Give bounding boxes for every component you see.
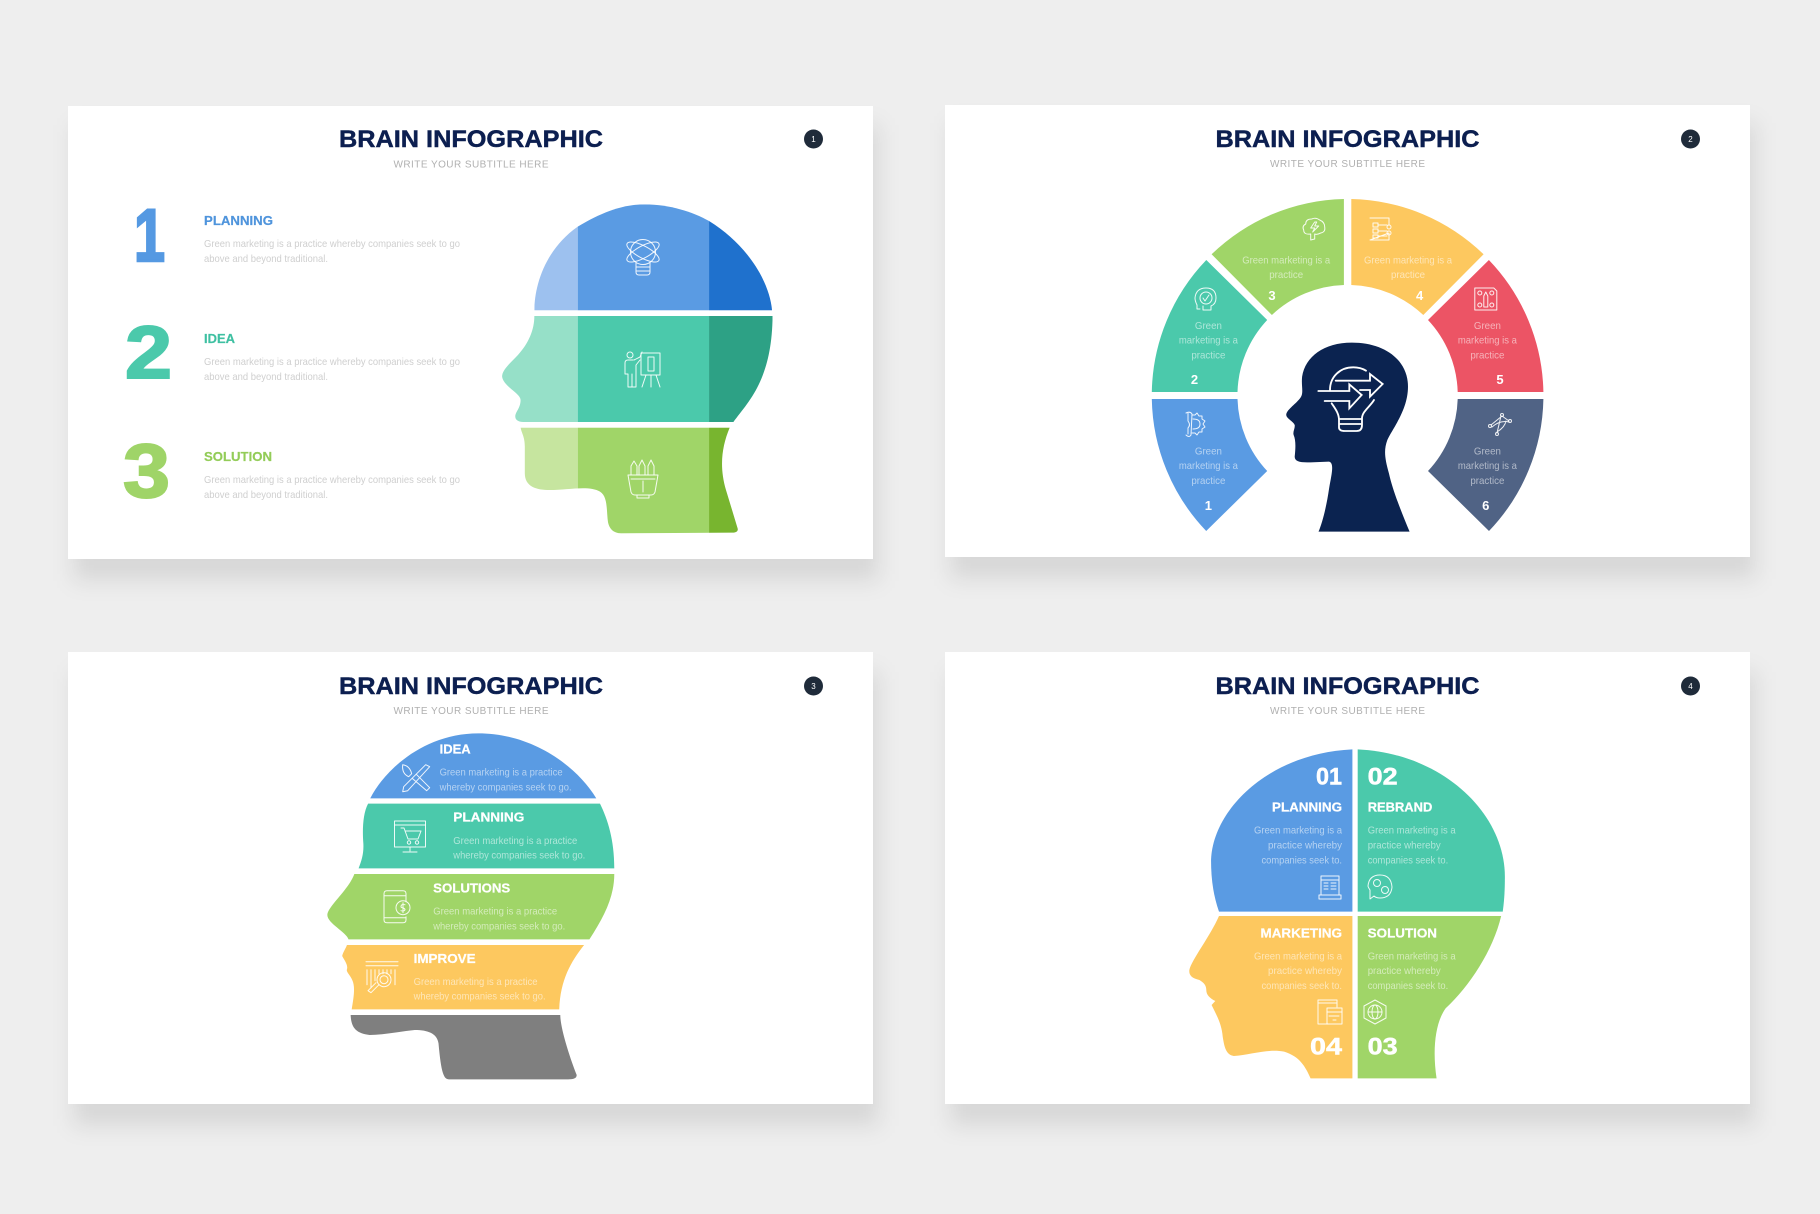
head diagram <box>494 200 778 535</box>
quadrant 03: Green marketing is a <box>1368 950 1456 962</box>
segment 5: 5 <box>1496 372 1504 387</box>
band: idea: IDEA <box>440 742 471 757</box>
page badge <box>1681 130 1700 148</box>
icon: network globe <box>1364 1000 1386 1024</box>
item 2 heading: IDEA <box>204 331 236 346</box>
subtitle: WRITE YOUR SUBTITLE HERE <box>394 706 549 717</box>
segment 1: marketing is a <box>1179 460 1238 472</box>
band: idea: Green marketing is a practice <box>440 767 563 779</box>
band: planning: Green marketing is a practice <box>453 835 577 847</box>
panel 1: three-layer head <box>68 106 873 559</box>
band: idea: whereby companies seek to go. <box>439 781 572 793</box>
segment 6: Green <box>1474 445 1501 457</box>
band: planning <box>394 810 585 862</box>
head band: top <box>534 204 772 310</box>
band: improve <box>366 951 546 1003</box>
item 3 text: Green marketing is a practice whereby companies seek to go <box>204 474 460 486</box>
band: idea <box>403 742 572 793</box>
band: solutions: whereby companies seek to go. <box>432 920 565 932</box>
item 1 text <box>204 238 460 265</box>
quadrant shapes <box>1189 749 1505 1078</box>
item 1 number: 1 <box>134 194 165 277</box>
head band shapes <box>327 733 614 1079</box>
quadrant 04: 04 <box>1310 1033 1343 1060</box>
icon: pencil cup <box>628 460 658 498</box>
segment 6: 6 <box>1482 498 1489 513</box>
item 3 text: above and beyond traditional. <box>204 489 328 501</box>
quadrant 01 <box>1254 763 1343 899</box>
segment 5: marketing is a <box>1458 335 1517 347</box>
segment 6: practice <box>1470 475 1505 487</box>
icon: flow document <box>1370 218 1391 240</box>
segment 5: practice <box>1470 349 1505 361</box>
quadrant 04: practice whereby <box>1268 965 1343 977</box>
title: BRAIN INFOGRAPHIC <box>339 673 603 700</box>
quadrant 01: Green marketing is a <box>1254 825 1342 837</box>
head silhouette <box>1286 343 1410 532</box>
segment 1: practice <box>1191 475 1226 487</box>
icon: bulb with arrows <box>1318 367 1383 431</box>
quadrant 03 <box>1364 925 1456 1060</box>
icon: laptop with dashboard <box>1319 876 1341 899</box>
quadrant 02: practice whereby <box>1368 839 1441 851</box>
icon: lightbulb with orbits <box>624 238 662 275</box>
band: planning: whereby companies seek to go. <box>452 850 585 862</box>
quadrant 03: practice whereby <box>1368 965 1441 977</box>
segment 3: 3 <box>1268 288 1276 303</box>
panel shadows <box>73 123 1756 1126</box>
segment 4: 4 <box>1416 288 1424 303</box>
segment 3 <box>1212 199 1344 315</box>
quadrant 02: companies seek to. <box>1368 854 1448 866</box>
item 2 number: 2 <box>125 311 172 394</box>
panel 4: quadrant head <box>945 652 1750 1104</box>
quadrant 04: Green marketing is a <box>1254 950 1342 962</box>
quadrant 03: SOLUTION <box>1368 925 1437 940</box>
icon: barcode with magnifier <box>366 962 398 993</box>
segment 4 <box>1351 199 1484 315</box>
title: BRAIN INFOGRAPHIC <box>1216 673 1480 700</box>
band: solutions: Green marketing is a practice <box>433 906 557 918</box>
icon: idea check <box>1195 288 1216 310</box>
segment 4: practice <box>1391 269 1425 281</box>
icon: devices <box>1318 1000 1342 1024</box>
item 1 text: Green marketing is a practice whereby companies seek to go <box>204 238 460 250</box>
panel 3: stacked head bands <box>68 652 873 1104</box>
icon: design document <box>1475 288 1497 310</box>
item 3 heading: SOLUTION <box>204 449 272 464</box>
page badge <box>804 130 823 148</box>
segment 6 <box>1428 399 1543 531</box>
quadrant 01: practice whereby <box>1268 839 1343 851</box>
segment 5: Green <box>1474 320 1501 332</box>
quadrant 03: companies seek to. <box>1368 980 1448 992</box>
segment 4: Green marketing is a <box>1364 254 1452 266</box>
band: improve: Green marketing is a practice <box>414 976 538 988</box>
icon: shopping cart on monitor <box>394 821 426 852</box>
page badge <box>1681 676 1700 696</box>
quadrant 01: companies seek to. <box>1262 854 1342 866</box>
page badge: 3 <box>811 682 816 691</box>
page badge <box>804 676 823 696</box>
item 2 text: Green marketing is a practice whereby companies seek to go <box>204 356 460 368</box>
page badge: 2 <box>1688 135 1693 144</box>
quadrant 04: companies seek to. <box>1262 980 1342 992</box>
subtitle: WRITE YOUR SUBTITLE HERE <box>1270 706 1425 717</box>
band: solutions: SOLUTIONS <box>433 880 511 895</box>
icon: wrench gear <box>1186 412 1205 436</box>
icon: brain bolt <box>1303 218 1325 240</box>
quadrant 02 <box>1368 763 1456 899</box>
item 3 text <box>204 474 460 501</box>
icon: crossed pencils <box>403 765 430 792</box>
item 2 text <box>204 356 460 383</box>
quadrant 04: MARKETING <box>1260 925 1342 940</box>
subtitle: WRITE YOUR SUBTITLE HERE <box>394 160 549 170</box>
segment 2: Green <box>1195 320 1222 332</box>
quadrant 01: PLANNING <box>1272 799 1342 814</box>
item 3 number: 3 <box>123 429 170 514</box>
segment 2: marketing is a <box>1179 335 1238 347</box>
page badge: 1 <box>811 135 816 144</box>
band: solutions <box>384 880 565 932</box>
segment 2: 2 <box>1191 372 1198 387</box>
quadrant 02: REBRAND <box>1368 799 1432 814</box>
item 2 text: above and beyond traditional. <box>204 371 328 383</box>
icon: presenter at board <box>625 352 660 387</box>
band: improve: whereby companies seek to go. <box>413 991 546 1003</box>
segment 1: 1 <box>1205 498 1212 513</box>
quadrant 01: 01 <box>1316 763 1342 790</box>
panel 2: radial segments around head <box>945 105 1750 557</box>
subtitle: WRITE YOUR SUBTITLE HERE <box>1270 159 1425 170</box>
segment 1: Green <box>1195 445 1222 457</box>
segment 2: practice <box>1191 349 1226 361</box>
title: BRAIN INFOGRAPHIC <box>339 126 603 153</box>
segment 1 <box>1152 399 1267 531</box>
quadrant 02: 02 <box>1368 763 1398 790</box>
icon: phone with dollar <box>384 891 410 923</box>
head band: bottom <box>520 428 738 534</box>
band: improve: IMPROVE <box>414 951 476 966</box>
quadrant 04 <box>1254 925 1343 1060</box>
segment 3: Green marketing is a <box>1242 254 1330 266</box>
segment 6: marketing is a <box>1458 460 1517 472</box>
segment 3: practice <box>1269 269 1303 281</box>
title: BRAIN INFOGRAPHIC <box>1216 126 1480 153</box>
item 1 heading: PLANNING <box>204 213 273 228</box>
quadrant 03: 03 <box>1368 1033 1398 1060</box>
icon: vector nodes <box>1488 414 1512 436</box>
band: planning: PLANNING <box>453 810 524 825</box>
page badge: 4 <box>1688 682 1693 691</box>
item 1 text: above and beyond traditional. <box>204 253 328 265</box>
head band: middle <box>494 313 778 423</box>
segment 2 <box>1152 260 1267 392</box>
icon: gears speech bubble <box>1368 875 1392 899</box>
quadrant 02: Green marketing is a <box>1368 825 1456 837</box>
segment 5 <box>1428 260 1543 392</box>
